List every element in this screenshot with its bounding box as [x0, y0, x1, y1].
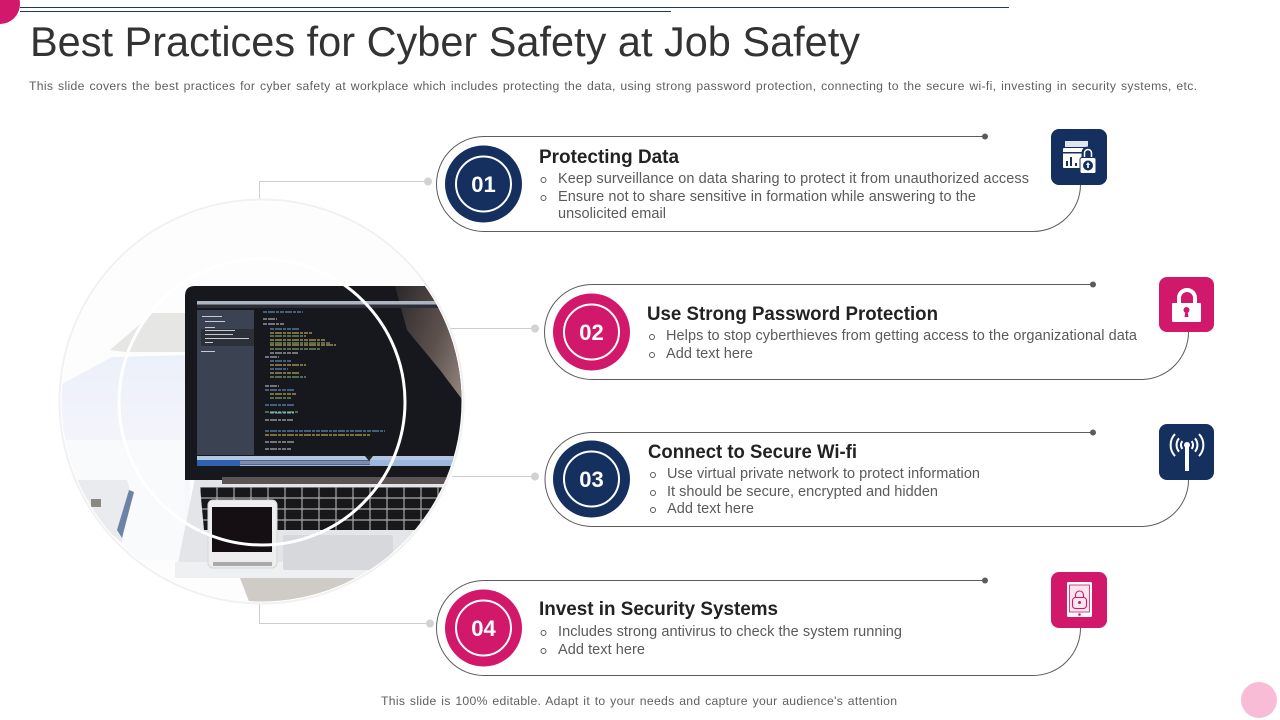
- bullets: Add text here: [558, 642, 645, 658]
- icon: tablet lock: [1051, 572, 1107, 628]
- screen glare: [395, 286, 462, 398]
- heading: Use Strong Password Protection: [647, 303, 938, 325]
- photo: laptop on desk: [60, 200, 480, 604]
- outline: [545, 432, 1188, 526]
- notebook and pen: [78, 480, 134, 543]
- bullets: Keep surveillance on data sharing to protect it from unauthorized access: [558, 171, 1029, 187]
- keyboard: [200, 487, 442, 530]
- outline: [437, 580, 1081, 676]
- bullets: Helps to stop cyberthieves from getting access to the organizational data: [666, 328, 1138, 344]
- corner accent circle: [1241, 682, 1277, 718]
- panel: 02 strong password: [545, 277, 1214, 380]
- number badge: 04: [471, 616, 496, 641]
- bullets: [650, 328, 1138, 362]
- menu bar: [197, 301, 438, 308]
- connector lines: [260, 178, 539, 628]
- panel: 01 protecting data: [437, 129, 1107, 232]
- bullets: Includes strong antivirus to check the system running: [558, 624, 902, 640]
- bullets: [541, 624, 902, 658]
- bullets: It should be secure, encrypted and hidden: [667, 484, 938, 500]
- top rule lines: [20, 8, 1009, 12]
- hinge: [222, 477, 472, 484]
- panel: 04 security systems: [437, 572, 1107, 676]
- icon: data lock: [1051, 129, 1107, 185]
- outline: [545, 284, 1188, 380]
- icon: padlock: [1159, 277, 1214, 332]
- bullets: Add text here: [667, 501, 754, 517]
- bullets: Use virtual private network to protect information: [667, 466, 980, 482]
- top accent circle: [0, 0, 20, 24]
- trackpad: [283, 535, 393, 570]
- number badge: 01: [471, 172, 496, 197]
- bullets: [541, 171, 1029, 222]
- number badge: [445, 146, 522, 222]
- phone: [208, 500, 277, 568]
- bullets: [650, 466, 980, 517]
- inner ring: [119, 259, 405, 545]
- end dot: [982, 134, 988, 140]
- code lines: [263, 312, 385, 449]
- screen sidebar: [197, 310, 254, 455]
- heading: Invest in Security Systems: [539, 598, 778, 620]
- screen bezel: [185, 286, 480, 480]
- bullets: Ensure not to share sensitive in formation while answering to the: [558, 189, 976, 205]
- number badge: [445, 590, 522, 666]
- icon: antenna: [1159, 424, 1214, 480]
- subtitle: This slide covers the best practices for cyber safety at workplace which includes protecting the data, using strong password protection, connecting to the secure wi-fi, investing in security systems, etc.: [29, 79, 1197, 93]
- number badge: [553, 294, 630, 370]
- number badge: 02: [579, 320, 604, 345]
- bullets: unsolicited email: [558, 206, 666, 222]
- number badge: 03: [579, 467, 604, 492]
- heading: Connect to Secure Wi-fi: [648, 441, 857, 463]
- end dot: [1090, 430, 1096, 436]
- footer note: This slide is 100% editable. Adapt it to your needs and capture your audience's attention: [381, 694, 897, 708]
- desk background: [62, 313, 185, 440]
- outline: [437, 136, 1081, 232]
- taskbar: [197, 456, 467, 466]
- end dot: [982, 578, 988, 584]
- end dot: [1090, 282, 1096, 288]
- heading: Protecting Data: [539, 146, 679, 168]
- panel: 03 secure wi-fi: [545, 424, 1214, 526]
- number badge: [553, 440, 630, 518]
- laptop base: [175, 480, 444, 602]
- sidebar rows: [201, 316, 254, 352]
- title: Best Practices for Cyber Safety at Job Safety: [30, 18, 860, 65]
- bullets: Add text here: [666, 346, 753, 362]
